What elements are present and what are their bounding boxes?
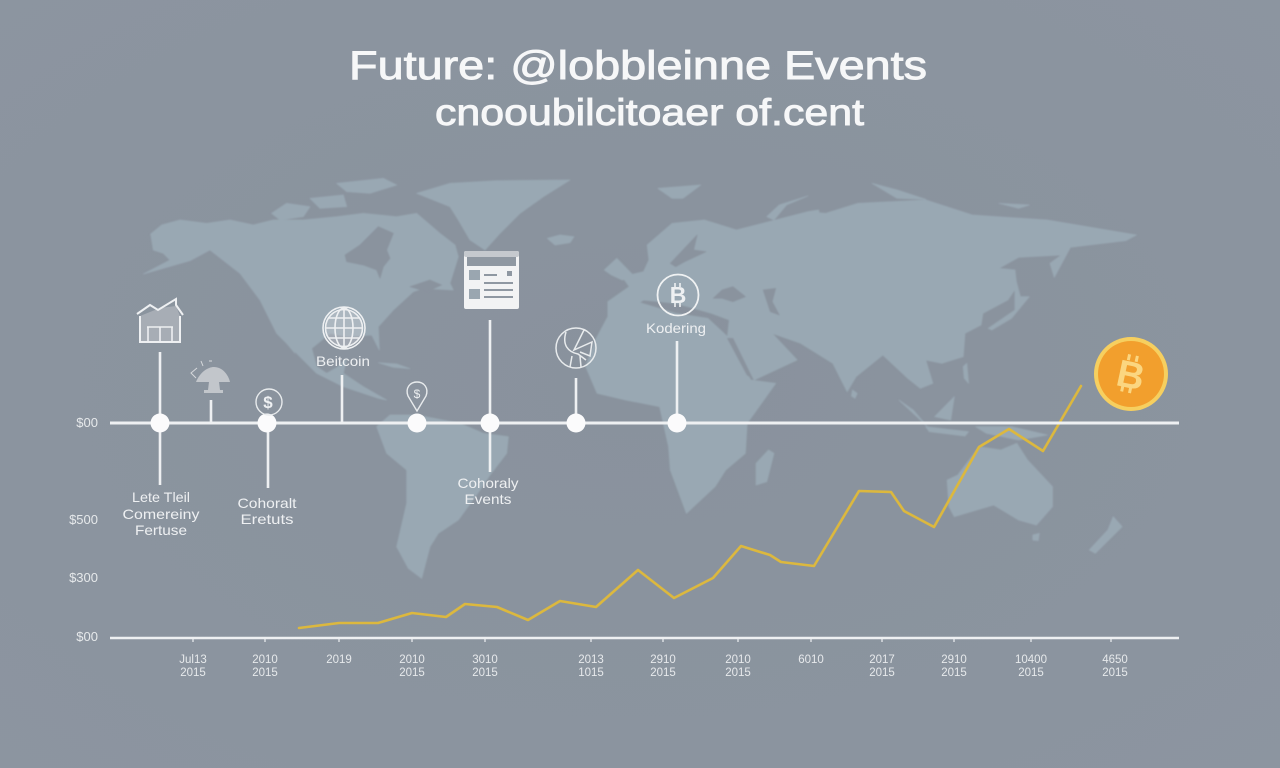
icon: bitcoin circle outline xyxy=(658,274,698,316)
x axis labels: 1015 xyxy=(578,667,604,679)
y axis labels: $00 xyxy=(76,629,98,644)
event labels xyxy=(122,320,706,538)
x axis labels: 4650 xyxy=(1102,654,1128,666)
y axis labels xyxy=(69,415,98,644)
map: Hudson Bay xyxy=(345,227,393,278)
title line 1: Future: @lobbleinne Events xyxy=(349,44,927,88)
x axis labels xyxy=(179,654,1128,679)
x axis labels: 2015 xyxy=(869,667,895,679)
icon: gold bitcoin coin xyxy=(1094,337,1168,411)
x axis labels: 2015 xyxy=(725,667,751,679)
map: Eurasia, Africa, Oceania xyxy=(586,183,1136,553)
x axis labels: 2010 xyxy=(725,654,751,666)
world map xyxy=(143,178,1136,578)
timeline xyxy=(110,320,1179,488)
x axis labels: 10400 xyxy=(1015,654,1047,666)
x axis labels: 2017 xyxy=(869,654,895,666)
timeline axis xyxy=(110,422,1179,424)
y axis labels: $00 xyxy=(76,415,98,430)
icon: house with trend roof xyxy=(137,299,183,342)
price line chart xyxy=(299,386,1081,628)
label: Events: Events xyxy=(464,491,512,507)
label: Beitcoin: Beitcoin xyxy=(316,353,370,369)
map: Americas and Greenland xyxy=(143,178,574,578)
map: inland seas xyxy=(670,235,779,378)
timeline nodes xyxy=(150,414,686,432)
icon: location pin with dollar xyxy=(407,382,427,411)
x axis labels: 2910 xyxy=(941,654,967,666)
timeline stems xyxy=(160,320,677,488)
x axis labels: 2910 xyxy=(650,654,676,666)
icon: location pin with dollar: $ xyxy=(414,387,421,401)
label: Lete Tleil: Lete Tleil xyxy=(132,489,190,505)
x axis labels: 3010 xyxy=(472,654,498,666)
title xyxy=(349,44,927,133)
y axis labels: $500 xyxy=(69,512,98,527)
x axis labels: 2015 xyxy=(941,667,967,679)
label: Eretuts: Eretuts xyxy=(240,511,294,527)
x axis labels: 2015 xyxy=(1018,667,1044,679)
icon: dome lamp xyxy=(191,361,230,393)
label: Kodering: Kodering xyxy=(646,320,706,336)
x axis labels: 2013 xyxy=(578,654,604,666)
x axis labels: 2015 xyxy=(472,667,498,679)
x axis labels: 2019 xyxy=(326,654,352,666)
label: Comereiny: Comereiny xyxy=(122,506,200,522)
icon: gold bitcoin coin: B xyxy=(1113,353,1148,399)
x axis labels: 6010 xyxy=(798,654,824,666)
x axis labels: 2015 xyxy=(180,667,206,679)
y axis labels: $300 xyxy=(69,570,98,585)
bottom axis xyxy=(110,638,1179,642)
x axis labels: 2015 xyxy=(650,667,676,679)
icon: bitcoin circle outline: B xyxy=(670,282,686,308)
x axis labels: Jul13 xyxy=(179,654,207,666)
x axis labels: 2010 xyxy=(252,654,278,666)
label: Fertuse: Fertuse xyxy=(135,522,187,538)
icon: dollar coin: $ xyxy=(263,393,273,412)
x axis labels: 2015 xyxy=(252,667,278,679)
icon: network circle xyxy=(556,328,596,368)
x axis labels: 2015 xyxy=(399,667,425,679)
icon: document panel xyxy=(464,251,519,309)
label: Cohoraly: Cohoraly xyxy=(458,475,518,491)
label: Cohoralt: Cohoralt xyxy=(238,495,297,511)
icon: dollar coin xyxy=(256,389,282,415)
title line 2: cnooubilcitoaer of.cent xyxy=(435,92,865,133)
x axis labels: 2010 xyxy=(399,654,425,666)
x axis labels: 2015 xyxy=(1102,667,1128,679)
icon: globe xyxy=(323,307,365,349)
